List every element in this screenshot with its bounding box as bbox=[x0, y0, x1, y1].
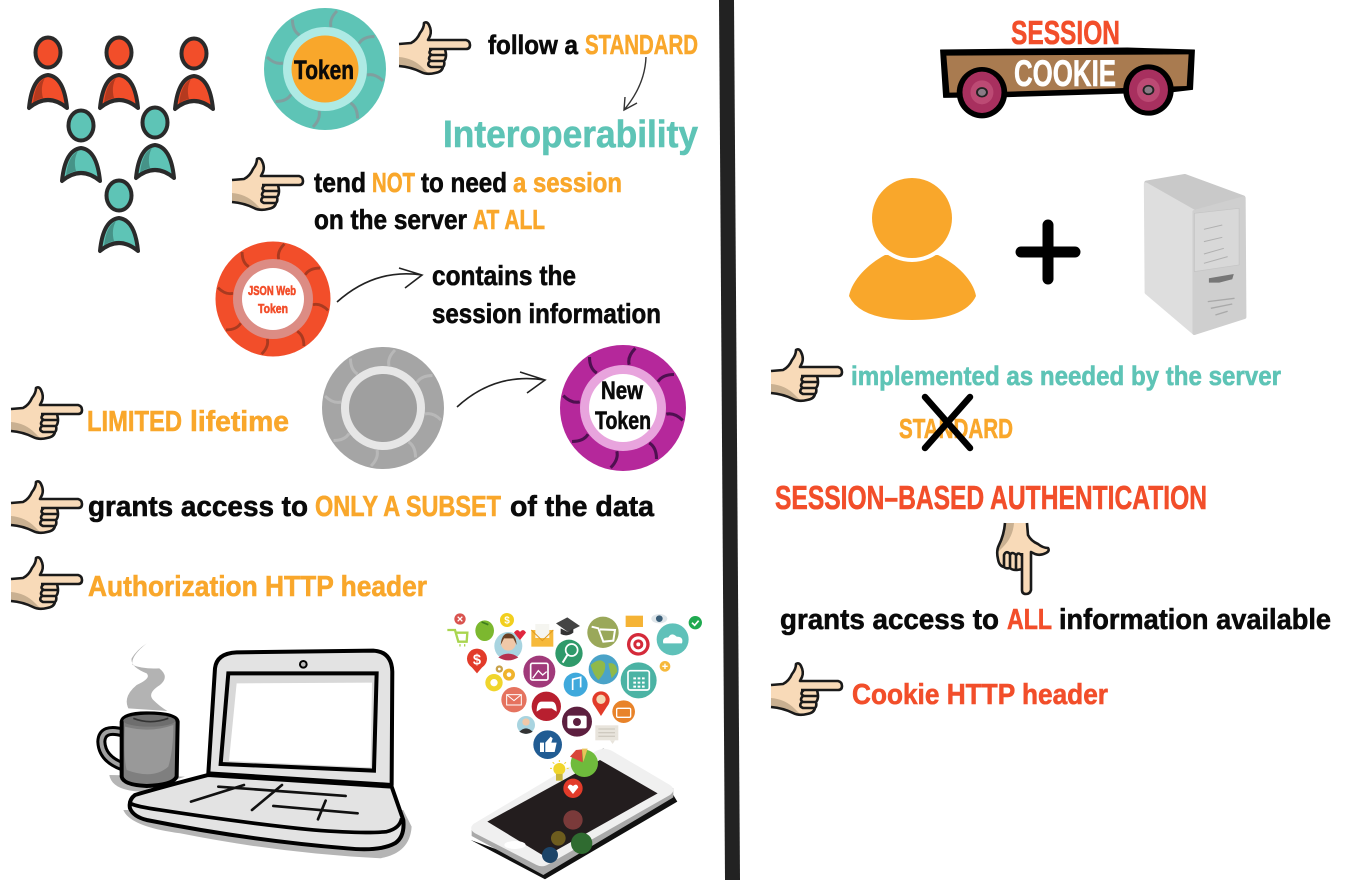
arrow: expired token to new token bbox=[457, 372, 545, 407]
illustration: session cookie wagon bbox=[941, 48, 1194, 118]
text: tend not to need a session on the server at all: to need bbox=[421, 167, 507, 198]
icon: JSON web token coin: Token bbox=[258, 301, 288, 316]
illustration: smartphone with app icons bbox=[447, 613, 702, 879]
text: tend not to need a session on the server at all bbox=[314, 167, 622, 235]
icon: pointing hand bbox=[11, 481, 82, 533]
text: follow a standard bbox=[488, 29, 698, 60]
text: grants access to all information available: grants access to bbox=[780, 604, 999, 636]
icon: token coin: Token bbox=[294, 55, 354, 85]
illustration: smartphone with app icons: $ bbox=[473, 652, 481, 668]
text: contains the session information bbox=[432, 260, 661, 329]
icon: pointing hand bbox=[11, 557, 82, 609]
illustration: smartphone with app icons: $ bbox=[504, 616, 510, 627]
icon: server tower bbox=[1146, 176, 1244, 333]
title: cookie: COOKIE bbox=[1014, 53, 1116, 94]
icon: token coin bbox=[264, 8, 386, 130]
text: interoperability: Interoperability bbox=[443, 114, 698, 156]
icon: group of people bbox=[29, 38, 213, 251]
text: tend not to need a session on the server at all: tend bbox=[314, 167, 366, 198]
text: standard crossed out: STANDARD bbox=[899, 413, 1013, 444]
text: grants access to all information available: information available bbox=[1059, 604, 1331, 636]
text: grants access to all information available: ALL bbox=[1007, 604, 1052, 636]
vertical divider bbox=[719, 0, 740, 880]
text: grants access to only a subset of the data: grants access to bbox=[88, 491, 308, 523]
text: follow a standard: follow a bbox=[488, 30, 579, 60]
text: grants access to all information available bbox=[780, 604, 1331, 636]
text: limited lifetime: LIMITED bbox=[87, 406, 182, 438]
icon: new token coin: New bbox=[601, 377, 643, 405]
icon: new token coin bbox=[560, 345, 686, 471]
text: grants access to only a subset of the data: ONLY A SUBSET bbox=[315, 491, 501, 523]
icon: JSON web token coin bbox=[216, 242, 330, 356]
icon: expired gray token bbox=[322, 347, 444, 469]
text: grants access to only a subset of the data: of the data bbox=[510, 491, 655, 523]
title: session: SESSION bbox=[1011, 14, 1120, 51]
text: grants access to only a subset of the data bbox=[88, 491, 655, 523]
text: standard crossed out bbox=[899, 397, 1013, 448]
text: tend not to need a session on the server at all: AT ALL bbox=[473, 204, 545, 235]
icon: JSON web token coin: JSON Web bbox=[248, 283, 296, 298]
text: tend not to need a session on the server at all: on the server bbox=[314, 204, 467, 235]
icon: user bbox=[849, 174, 976, 320]
icon: pointing hand bbox=[771, 663, 842, 715]
icon: new token coin: Token bbox=[595, 407, 651, 435]
icon: plus sign bbox=[1021, 225, 1075, 279]
text: tend not to need a session on the server at all: NOT bbox=[372, 167, 415, 198]
text: implemented as needed by the server: implemented as needed by the server bbox=[851, 361, 1281, 391]
text: limited lifetime bbox=[87, 406, 289, 438]
text: limited lifetime: lifetime bbox=[190, 406, 289, 438]
icon: hand pointing down bbox=[997, 523, 1049, 594]
text: contains the session information: session information bbox=[432, 298, 661, 329]
illustration: coffee mug and laptop bbox=[101, 643, 412, 858]
icon: pointing hand bbox=[11, 387, 82, 439]
icon: pointing hand bbox=[771, 349, 842, 401]
arrow: token to session information bbox=[337, 268, 422, 302]
text: session-based authentication: SESSION–BASED AUTHENTICATION bbox=[775, 479, 1207, 516]
text: tend not to need a session on the server at all: a session bbox=[513, 167, 622, 198]
text: contains the session information: contains the bbox=[432, 260, 576, 291]
text: authorization http header: Authorization HTTP header bbox=[88, 571, 427, 603]
icon: pointing hand bbox=[399, 22, 470, 74]
arrow: standard to interoperability bbox=[624, 57, 646, 110]
text: follow a standard: STANDARD bbox=[585, 29, 698, 60]
text: cookie http header: Cookie HTTP header bbox=[852, 679, 1108, 711]
icon: pointing hand bbox=[232, 158, 303, 210]
